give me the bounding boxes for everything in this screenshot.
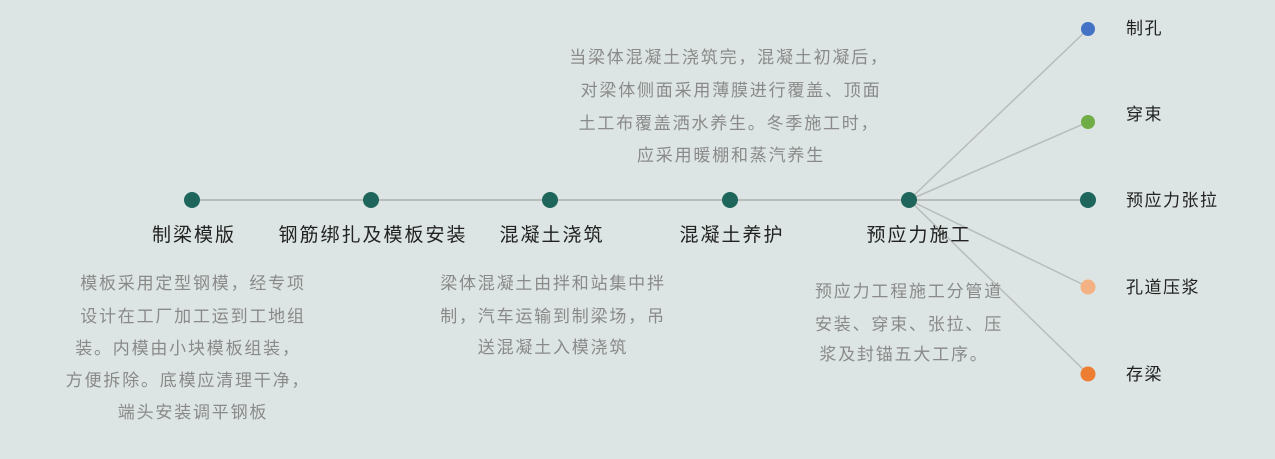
- description: formwork: 模板采用定型钢模，经专项: [80, 274, 306, 293]
- description: pouring: [440, 274, 666, 357]
- step titles: 钢筋绑扎及模板安装: [278, 224, 468, 246]
- description: pouring: 梁体混凝土由拌和站集中拌: [440, 274, 666, 293]
- description: formwork: 方便拆除。底模应清理干净，: [66, 371, 310, 390]
- description: formwork: 装。内模由小块模板组装，: [75, 339, 301, 358]
- sub-steps: [1080, 19, 1218, 384]
- description: formwork: 端头安装调平钢板: [118, 403, 268, 422]
- sub-steps: 孔道压浆: [1126, 278, 1200, 297]
- step titles: 混凝土浇筑: [499, 224, 605, 246]
- step titles: [152, 224, 972, 246]
- sub-steps: 存梁: [1126, 365, 1163, 384]
- description: prestress: 安装、穿束、张拉、压: [815, 315, 1003, 334]
- description: curing: 对梁体侧面采用薄膜进行覆盖、顶面: [581, 81, 881, 100]
- step titles: 预应力施工: [866, 224, 972, 246]
- timeline: [184, 29, 1088, 374]
- description: pouring: 制，汽车运输到制梁场，吊: [440, 307, 666, 326]
- description: curing: 当梁体混凝土浇筑完，混凝土初凝后，: [569, 48, 889, 67]
- description: curing: [569, 48, 889, 165]
- description: curing: 应采用暖棚和蒸汽养生: [637, 146, 825, 165]
- sub-steps: 制孔: [1126, 19, 1163, 38]
- description: formwork: 设计在工厂加工运到工地组: [80, 307, 306, 326]
- step titles: 制梁模版: [152, 224, 236, 246]
- description: prestress: 浆及封锚五大工序。: [819, 345, 989, 364]
- description: prestress: 预应力工程施工分管道: [815, 282, 1003, 301]
- sub-steps: 预应力张拉: [1126, 191, 1218, 210]
- description: prestress: [815, 282, 1003, 364]
- description: pouring: 送混凝土入模浇筑: [478, 338, 628, 357]
- description: curing: 土工布覆盖洒水养生。冬季施工时，: [579, 114, 879, 133]
- sub-steps: 穿束: [1126, 105, 1163, 124]
- description: formwork: [66, 274, 310, 422]
- step titles: 混凝土养护: [679, 224, 785, 246]
